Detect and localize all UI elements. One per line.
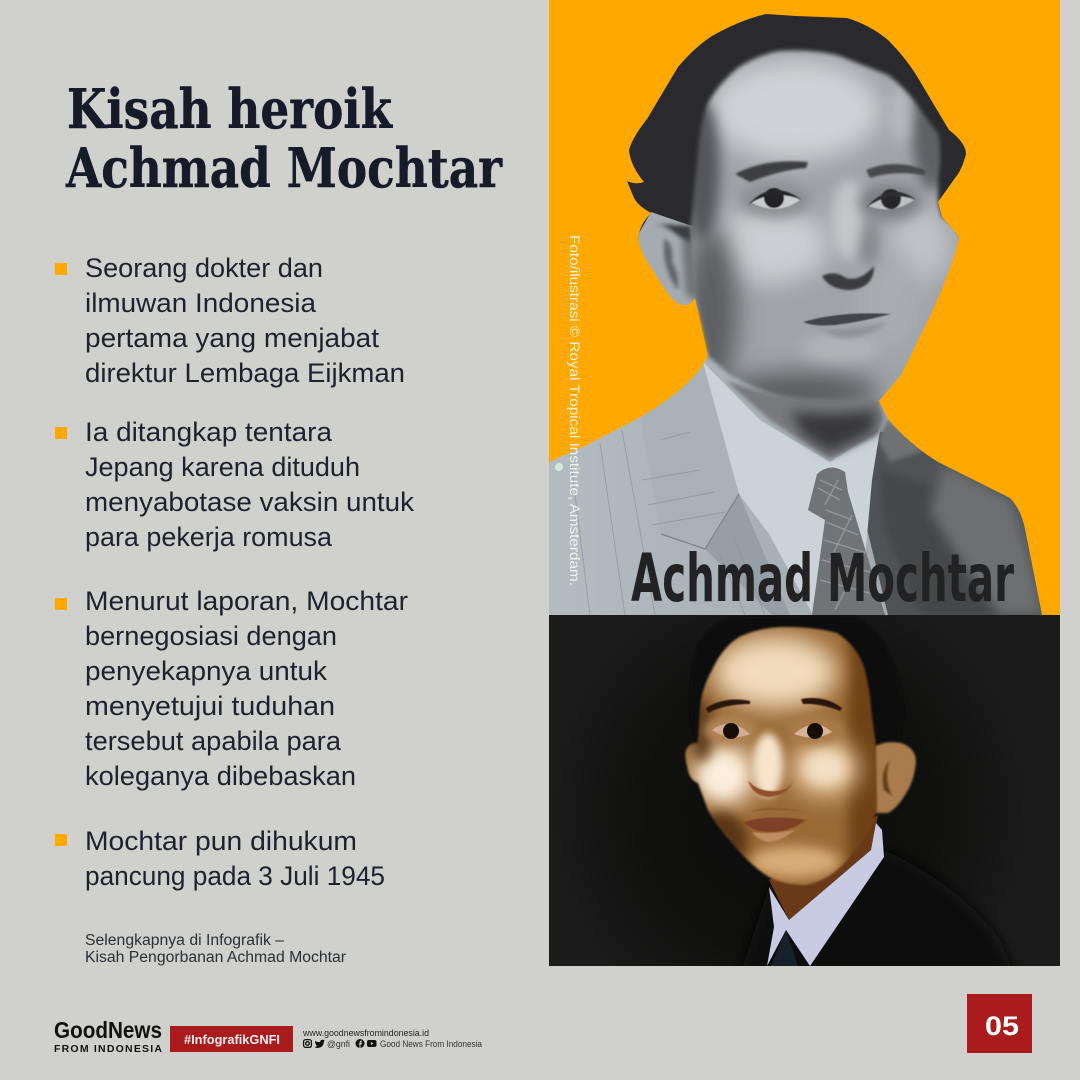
bullet list item 3: bernegosiasi dengan xyxy=(85,621,337,651)
footer logo: FROM INDONESIA xyxy=(54,1043,162,1055)
bullet list item 4: Mochtar pun dihukum xyxy=(85,826,357,856)
page number badge: 05 xyxy=(985,1011,1019,1041)
hashtag label: #InfografikGNFI xyxy=(184,1033,280,1047)
title xyxy=(65,77,502,200)
portrait: black and white photo of Achmad Mochtar xyxy=(549,0,1060,615)
social links: @gnfi xyxy=(327,1039,350,1049)
title: Kisah heroik xyxy=(67,77,393,141)
dark shading around head xyxy=(614,667,966,966)
bullet list item 1: direktur Lembaga Eijkman xyxy=(85,358,405,388)
bullet list item 3: menyetujui tuduhan xyxy=(85,691,335,721)
ear xyxy=(874,742,916,813)
facial features xyxy=(706,698,842,842)
hair xyxy=(690,616,904,711)
jacket xyxy=(549,350,1060,615)
neck shadow xyxy=(725,380,884,459)
bullet list item 3: tersebut apabila para xyxy=(85,726,341,756)
icon: youtube xyxy=(367,1040,376,1047)
bullet list item 2: para pekerja romusa xyxy=(85,522,332,552)
social links xyxy=(302,1028,482,1049)
panel: dark portrait background xyxy=(549,615,1060,966)
page number badge xyxy=(967,994,1032,1053)
ear xyxy=(635,212,702,312)
photo credit: Foto/ilustrasi © Royal Tropical Institute, Amsterdam. xyxy=(567,235,582,586)
bullet list item 2 xyxy=(55,417,415,552)
tie xyxy=(808,467,885,615)
bullet list item 3 xyxy=(55,586,408,791)
icon: twitter xyxy=(314,1040,324,1048)
bullet list item 2: menyabotase vaksin untuk xyxy=(85,487,415,517)
bullet list item 4 xyxy=(55,826,385,891)
icon: instagram xyxy=(304,1040,311,1047)
bullet list item 2: Ia ditangkap tentara xyxy=(85,417,332,447)
shirt collar xyxy=(767,823,884,966)
shirt xyxy=(703,362,880,615)
hair xyxy=(627,14,966,240)
source note xyxy=(85,932,346,966)
neck xyxy=(769,815,878,920)
social links: www.goodnewsfromindonesia.id xyxy=(302,1028,429,1038)
portrait: painted colour portrait of Achmad Mochtar xyxy=(614,615,1014,966)
face xyxy=(688,48,959,403)
bullet list item 3: Menurut laporan, Mochtar xyxy=(85,586,408,616)
bullet list item 3: koleganya dibebaskan xyxy=(85,761,356,791)
mouth xyxy=(803,313,891,338)
face xyxy=(680,620,888,890)
bullet list item 1 xyxy=(55,253,405,388)
jacket xyxy=(906,879,1014,966)
footer logo xyxy=(54,1017,162,1055)
hashtag label xyxy=(170,1026,293,1052)
bullet list item 1: ilmuwan Indonesia xyxy=(85,288,316,318)
icon: facebook xyxy=(356,1039,364,1048)
bullet list item 3: penyekapnya untuk xyxy=(85,656,328,686)
tie xyxy=(771,930,798,966)
footer logo: GoodNews xyxy=(54,1017,162,1043)
source note: Kisah Pengorbanan Achmad Mochtar xyxy=(85,949,346,966)
bullet list item 4: pancung pada 3 Juli 1945 xyxy=(85,861,385,891)
bullet list item 2: Jepang karena dituduh xyxy=(85,452,360,482)
brows xyxy=(735,161,925,182)
nose shadow xyxy=(822,266,874,290)
social links: Good News From Indonesia xyxy=(380,1039,482,1049)
bullet list item 1: Seorang dokter dan xyxy=(85,253,323,283)
bullet list item 1: pertama yang menjabat xyxy=(85,323,380,353)
eyes xyxy=(748,188,916,209)
panel: orange portrait background xyxy=(549,0,1060,615)
title: Achmad Mochtar xyxy=(65,136,502,200)
source note: Selengkapnya di Infografik – xyxy=(85,932,284,949)
